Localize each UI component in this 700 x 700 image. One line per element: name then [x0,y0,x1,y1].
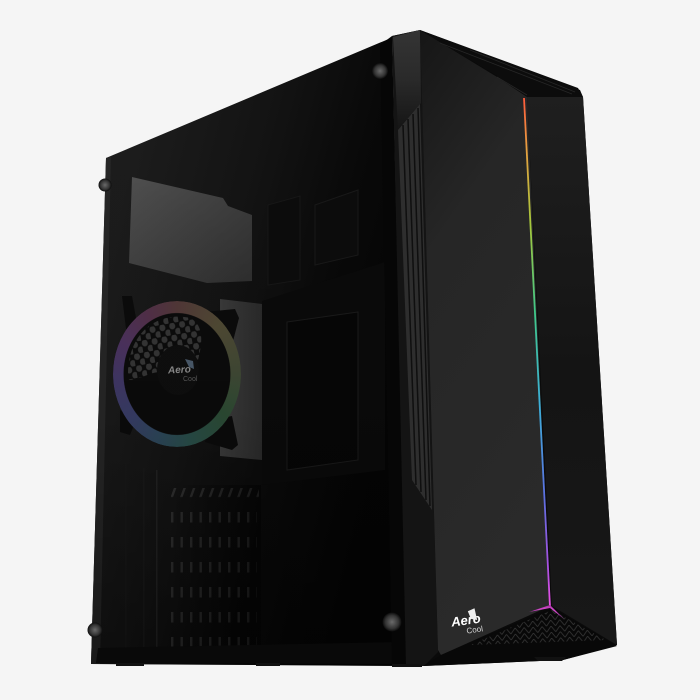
RGB light strip [524,98,550,607]
panel: front vent column [392,30,438,666]
front logo: Aero [449,611,482,630]
magenta V light [529,605,564,619]
front base silhouette [392,30,617,666]
fan logo [167,359,198,383]
interior drive bays [262,190,385,485]
fan logo: Cool [183,376,198,383]
vent slats [398,104,432,510]
expansion slot rail [125,462,158,660]
panel: glass side panel [91,38,407,666]
power supply shroud [129,177,252,283]
PC case [88,30,617,667]
drive cage plate [220,299,262,460]
panel: front right strip [527,97,617,645]
upper facet [393,30,421,129]
fan body with corner ears [115,296,239,450]
foot [534,657,566,661]
screw: bottom left [88,622,102,638]
screw: top right [372,63,388,79]
panel: front main face [420,30,550,655]
fan logo: Aero [167,364,191,377]
feet [116,663,422,667]
fan grille holes [128,317,201,380]
motherboard tray vents [171,485,261,655]
vertical darkening of side [91,38,407,666]
bottom rail [96,642,401,664]
front logo [449,607,484,638]
front logo: Cool [466,624,484,636]
RGB fan ring [113,301,243,449]
top vents [420,30,583,97]
fan hub [157,345,199,395]
bottom mesh vent [423,608,617,666]
side frame pillar [380,36,407,666]
screw: bottom right [382,612,402,632]
left edge of glass [91,157,111,664]
screw: top left [98,178,112,192]
